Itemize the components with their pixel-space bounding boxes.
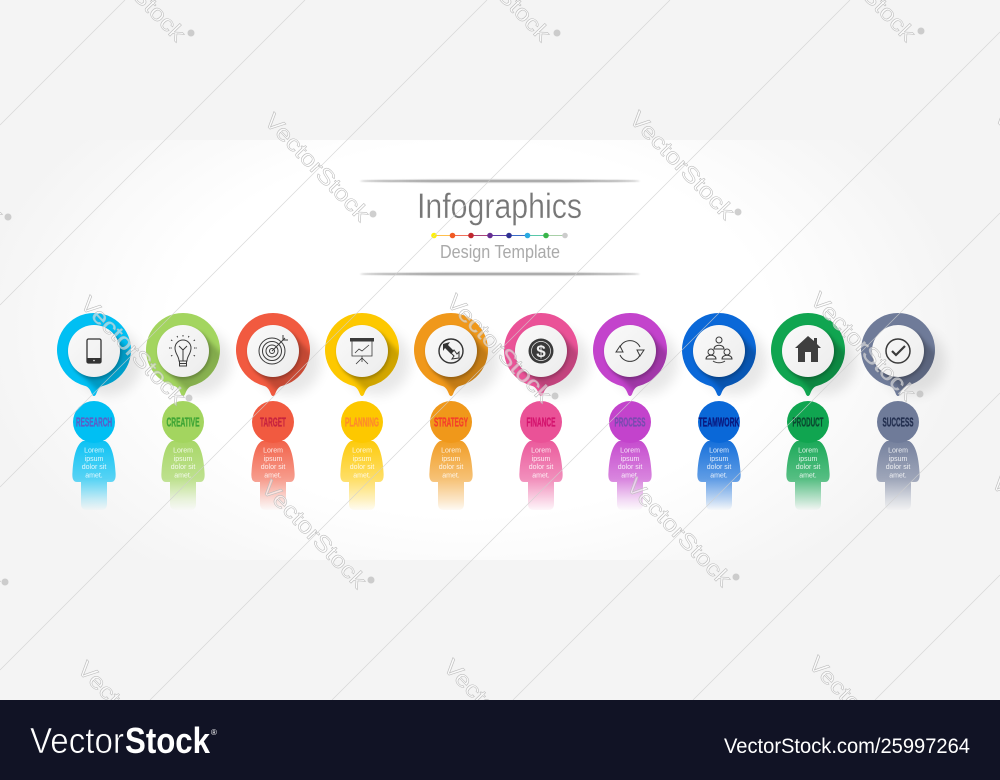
icon: target <box>259 335 288 364</box>
pin <box>57 313 143 396</box>
person card <box>251 401 295 510</box>
person card: dolor sit <box>82 464 106 471</box>
person card: Lorem <box>798 448 818 454</box>
person card: ipsum <box>710 456 728 463</box>
footer logo: Stock <box>125 720 211 761</box>
step: creative <box>146 313 232 508</box>
footer band <box>0 700 1000 780</box>
person card: SUCCESS <box>882 416 914 430</box>
person card <box>608 401 652 510</box>
person card: ipsum <box>353 456 371 463</box>
step: research <box>57 313 143 509</box>
pin <box>146 313 232 396</box>
person card <box>340 401 384 510</box>
person card: amet. <box>353 472 371 479</box>
person card: amet. <box>85 472 103 479</box>
watermarks: VectorStock <box>441 289 557 408</box>
icon: presentation board <box>350 338 374 364</box>
person card: TEAMWORK <box>698 416 740 430</box>
person card: dolor sit <box>529 464 553 471</box>
person card: ipsum <box>799 456 817 463</box>
person card: dolor sit <box>439 464 463 471</box>
watermarks: VectorStock <box>259 108 375 227</box>
step: success <box>861 313 948 508</box>
person card: dolor sit <box>261 464 285 471</box>
person card: amet. <box>174 472 192 479</box>
watermarks: VectorStock <box>803 651 919 770</box>
person card: CREATIVE <box>166 416 200 430</box>
person card: amet. <box>621 472 639 479</box>
icon: light bulb <box>169 335 197 366</box>
step: teamwork <box>682 313 768 510</box>
person card: dolor sit <box>618 464 642 471</box>
person card <box>876 401 920 510</box>
person card: dolor sit <box>171 464 195 471</box>
subheading: Design Template <box>440 242 560 262</box>
person card: ipsum <box>621 456 639 463</box>
person card: Lorem <box>888 448 908 454</box>
person card: ipsum <box>532 456 550 463</box>
person card <box>429 401 473 510</box>
watermarks: VectorStock <box>624 106 740 225</box>
watermarks: VectorStock <box>805 287 921 406</box>
person card: Lorem <box>709 448 729 454</box>
person card: amet. <box>710 472 728 479</box>
person card: Lorem <box>620 448 640 454</box>
pin <box>593 313 680 396</box>
pin <box>236 313 322 396</box>
footer url: VectorStock.com/25997264 <box>724 735 970 758</box>
person card: Lorem <box>531 448 551 454</box>
person card: ipsum <box>85 456 103 463</box>
person card <box>72 401 116 510</box>
footer logo: ® <box>211 728 217 737</box>
pin <box>771 313 858 396</box>
person card: Lorem <box>352 448 372 454</box>
person card: RESEARCH <box>76 416 112 430</box>
watermarks: VectorStock <box>72 656 188 775</box>
person card: amet. <box>532 472 550 479</box>
pin <box>325 313 412 396</box>
person card <box>519 401 563 510</box>
person card: dolor sit <box>707 464 731 471</box>
icon: house <box>795 336 821 362</box>
person card: amet. <box>799 472 817 479</box>
person card: TARGET <box>260 416 286 430</box>
person card: ipsum <box>264 456 282 463</box>
person card <box>697 401 741 510</box>
person card: amet. <box>442 472 460 479</box>
person card: dolor sit <box>350 464 374 471</box>
person card: amet. <box>264 472 282 479</box>
dotted colour line <box>431 233 568 238</box>
person card: ipsum <box>442 456 460 463</box>
watermarks: VectorStock <box>621 473 737 592</box>
person card: Lorem <box>84 448 104 454</box>
step: finance <box>504 313 590 510</box>
watermarks: VectorStock <box>75 291 191 410</box>
person card: STRATEGY <box>434 416 468 430</box>
person card: Lorem <box>441 448 461 454</box>
person card: PLANNING <box>345 416 379 430</box>
pin <box>414 313 500 396</box>
icon: check mark <box>886 339 910 363</box>
icon: team <box>706 337 732 363</box>
watermarks: VectorStock <box>438 654 554 773</box>
pin <box>861 313 948 396</box>
person card: Lorem <box>263 448 283 454</box>
person card: FINANCE <box>526 416 556 430</box>
person card: ipsum <box>174 456 192 463</box>
person card: PROCESS <box>614 416 646 430</box>
person card: ipsum <box>889 456 907 463</box>
person card: PRODUCT <box>792 416 824 430</box>
person card: dolor sit <box>796 464 820 471</box>
step: planning <box>325 313 412 510</box>
person card: amet. <box>889 472 907 479</box>
heading: Infographics <box>417 187 582 226</box>
icon: dollar coin: $ <box>536 342 546 361</box>
step: product <box>771 313 858 510</box>
step: process <box>593 313 680 508</box>
icon: strategy arrows <box>439 339 463 363</box>
pin <box>504 313 590 396</box>
icon: phone <box>87 339 101 363</box>
person card <box>161 401 205 510</box>
step: strategy <box>414 313 500 510</box>
footer logo: Vector <box>30 720 124 761</box>
icon: dollar coin <box>528 338 554 364</box>
watermarks: VectorStock <box>256 475 372 594</box>
icon: cycle arrows <box>616 341 644 361</box>
person card: dolor sit <box>886 464 910 471</box>
step: target <box>236 313 322 508</box>
person card: Lorem <box>173 448 193 454</box>
title block <box>360 180 640 275</box>
pin <box>682 313 768 396</box>
person card <box>786 401 830 510</box>
